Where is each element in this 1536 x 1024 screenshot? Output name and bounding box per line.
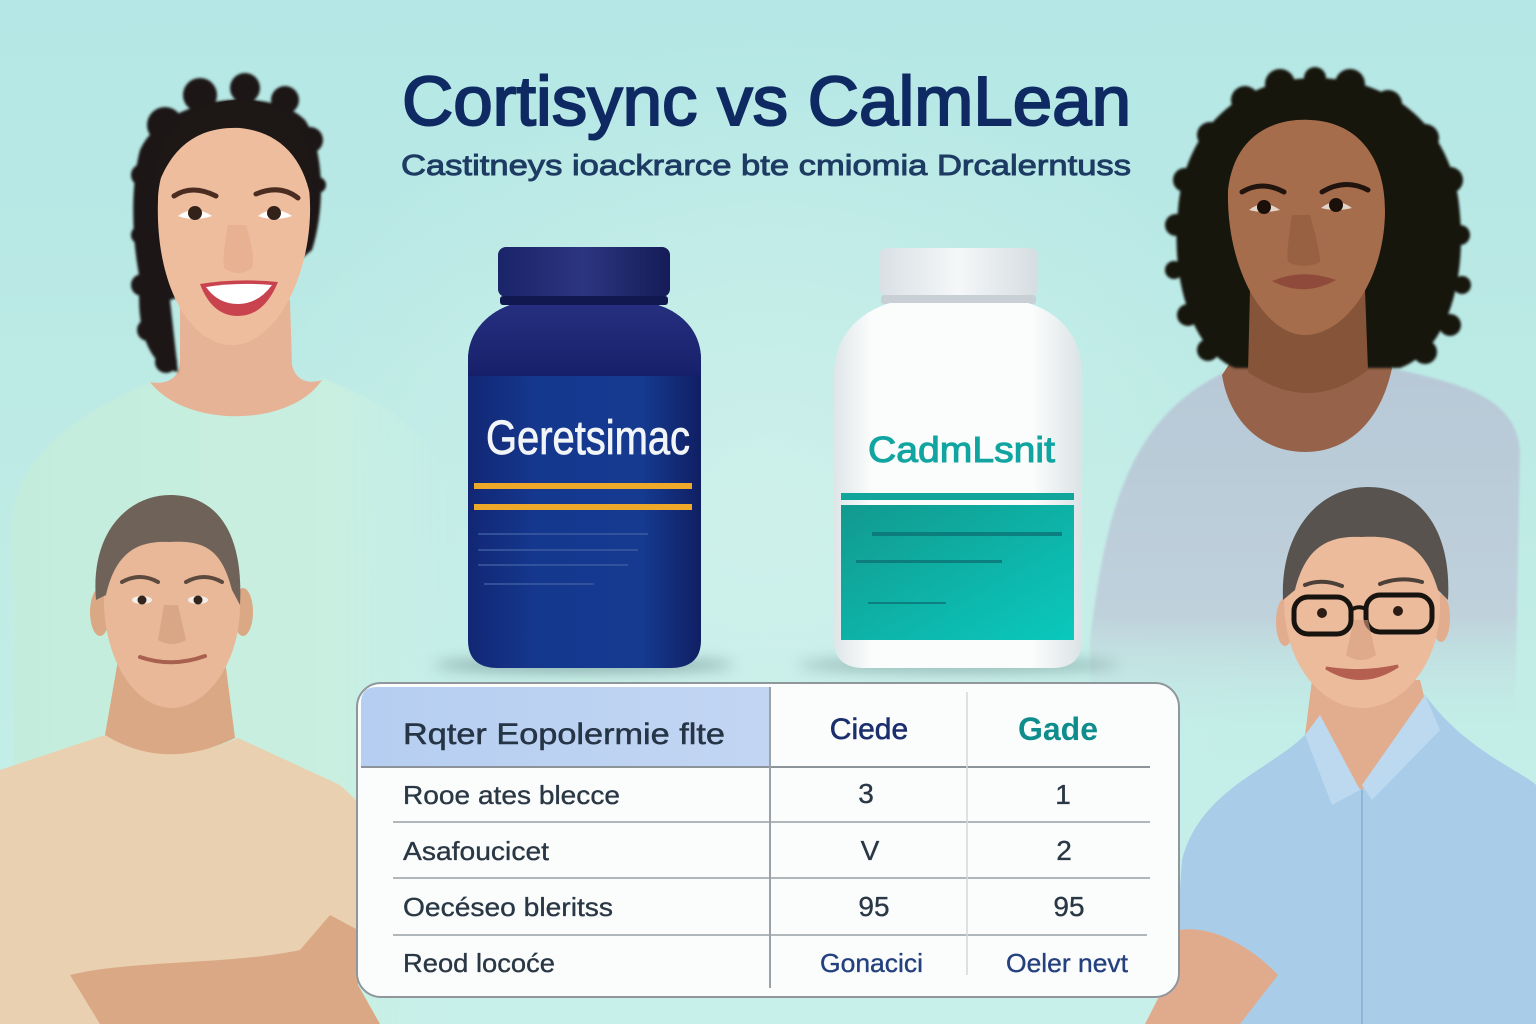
table row 3 — [403, 891, 1085, 922]
bottle label name: Geretsimac — [486, 412, 690, 465]
comparison table — [357, 683, 1179, 997]
title: Cortisync vs CalmLean — [402, 62, 1131, 140]
bottle label name: CadmLsnit — [868, 429, 1055, 470]
table row 1: 1 — [1055, 779, 1071, 810]
table row 3: 95 — [1053, 891, 1085, 922]
table row 2: V — [861, 835, 880, 866]
table header labels: Ciede — [830, 713, 908, 746]
person: man with glasses bottom right — [1145, 487, 1536, 1024]
table row 4: Oeler nevt — [1006, 948, 1129, 978]
bottle label stripes — [474, 483, 692, 510]
table header labels — [403, 711, 1098, 751]
table row 2: 2 — [1056, 835, 1072, 866]
table header labels: Gade — [1018, 711, 1098, 747]
table row 3: Oecéseo bleritss — [403, 892, 613, 922]
subtitle: Castitneys ioackrarce bte cmiomia Drcalerntuss — [401, 150, 1131, 182]
table row 1 — [403, 778, 1071, 810]
person: smiling woman top left — [12, 73, 445, 1024]
bottle teal label — [841, 493, 1074, 640]
table row 4: Gonacici — [820, 948, 923, 978]
table row 2: Asafoucicet — [403, 836, 550, 866]
table row 4 — [403, 948, 1129, 978]
person: man bottom left — [0, 495, 380, 1024]
bottle label small print — [478, 533, 648, 585]
table row 1: Rooe ates blecce — [403, 780, 620, 810]
table row 2 — [403, 835, 1072, 866]
table row 4: Reod locoće — [403, 948, 555, 978]
table header cell — [361, 687, 770, 767]
table row 1: 3 — [858, 778, 874, 809]
person: curly-haired woman top right — [1090, 67, 1520, 720]
table header labels: Rqter Eopolermie flte — [403, 718, 725, 751]
bottle: white supplement — [798, 248, 1118, 672]
bottle: blue supplement — [434, 247, 734, 672]
table row 3: 95 — [858, 891, 890, 922]
